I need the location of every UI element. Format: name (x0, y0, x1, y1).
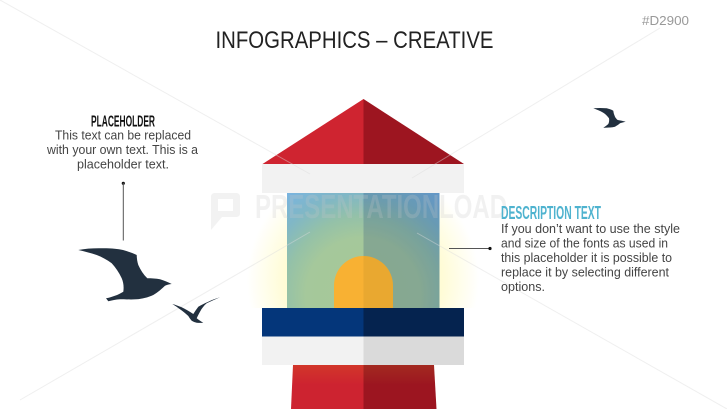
lamp (334, 256, 393, 308)
body text: description: replace it by selecting different (501, 264, 669, 280)
heading: placeholder: PLACEHOLDER (91, 114, 155, 130)
watermark (211, 188, 507, 230)
body text: description: and size of the fonts as used in (501, 236, 668, 250)
body text: placeholder: with your own text. This is a (46, 142, 199, 157)
watermark: PRESENTATIONLOAD (255, 188, 507, 225)
navy gallery band (262, 308, 464, 336)
code label: #D2900 (642, 13, 689, 28)
body text: description: If you don’t want to use the style (501, 221, 680, 236)
icon: large seagull (78, 248, 172, 301)
body text: placeholder: This text can be replaced (55, 128, 191, 142)
body text: description: this placeholder it is possible to (501, 250, 672, 265)
body text: description: options. (501, 279, 545, 294)
icon: distant seagull (593, 108, 626, 128)
body text: placeholder (46, 128, 199, 172)
body text: description (501, 221, 680, 294)
light glow (247, 193, 479, 308)
lower white band (262, 336, 464, 365)
text block: placeholder (46, 114, 199, 172)
upper white band (262, 164, 464, 193)
body text: placeholder: placeholder text. (77, 156, 169, 172)
heading: description: DESCRIPTION TEXT (501, 203, 601, 223)
text block: description (501, 203, 680, 294)
icon: small seagull (172, 297, 220, 323)
leader line: description (449, 247, 492, 250)
roof (262, 99, 464, 164)
lighthouse (247, 99, 479, 409)
tower (291, 365, 436, 409)
lantern window (287, 193, 440, 308)
title: INFOGRAPHICS – CREATIVE (216, 27, 494, 54)
leader line: placeholder (122, 182, 125, 240)
